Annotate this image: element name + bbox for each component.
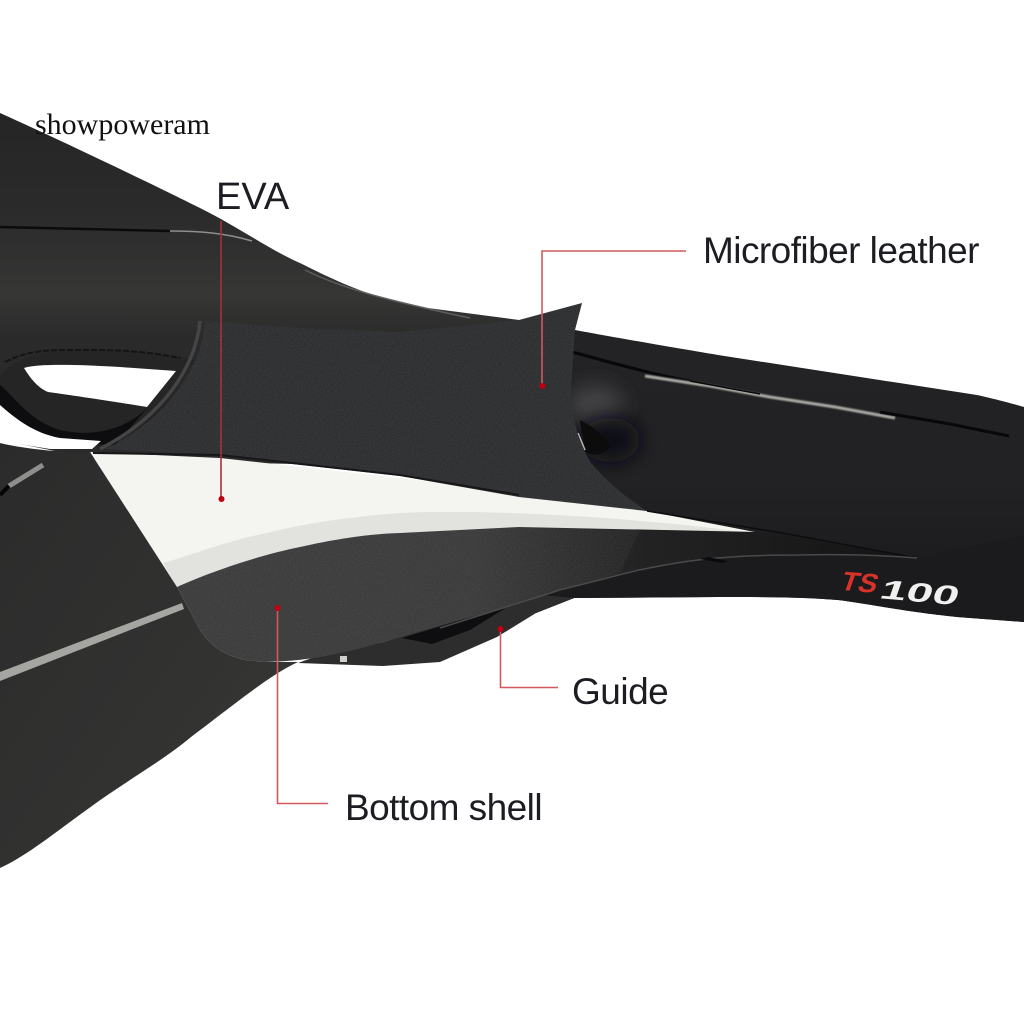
TS100 logo <box>835 566 966 611</box>
nose silver stripe <box>0 603 184 681</box>
saddle cut-out opening <box>0 350 195 449</box>
microfiber edge <box>100 321 200 449</box>
bottom shell layer <box>177 527 917 662</box>
label: Guide: Guide <box>572 671 668 712</box>
microfiber leather layer <box>105 303 647 511</box>
label: Microfiber leather: Microfiber leather <box>703 230 979 271</box>
label: Bottom shell: Bottom shell <box>345 787 542 828</box>
tail gloss around opening <box>567 385 640 462</box>
EVA edge shading <box>163 512 745 587</box>
nose spine seam <box>0 227 170 231</box>
label: EVA <box>216 176 290 502</box>
EVA foam layer <box>90 452 760 587</box>
tail stitch highlight <box>572 352 1009 436</box>
guide rail <box>298 595 574 666</box>
saddle tail body <box>536 330 1024 622</box>
watermark: showpoweram <box>35 108 210 141</box>
saddle illustration <box>0 113 1024 868</box>
saddle nose upper body <box>0 113 590 470</box>
label: Microfiber leather <box>540 230 979 389</box>
nose upper stripe <box>9 465 43 486</box>
TS100 logo: TS <box>837 566 883 599</box>
tail edge line <box>647 511 917 558</box>
label: Guide <box>498 626 668 712</box>
lower tail wedge <box>536 535 1024 622</box>
TS100 logo: 100 <box>876 574 964 611</box>
label: Bottom shell <box>274 605 542 828</box>
shell seam <box>440 555 917 628</box>
label: EVA: EVA <box>216 176 290 218</box>
saddle nose lower panel <box>0 443 298 868</box>
